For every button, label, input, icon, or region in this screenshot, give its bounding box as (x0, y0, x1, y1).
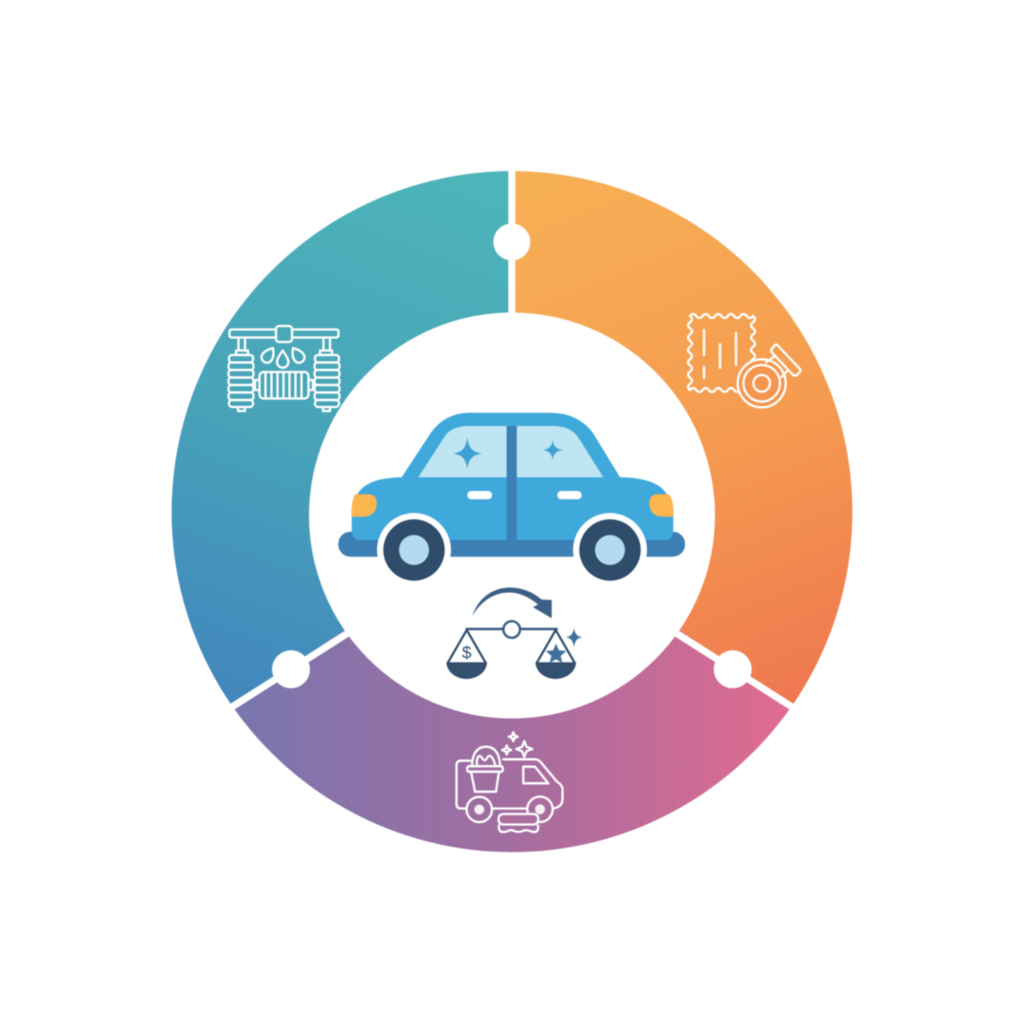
car body (352, 413, 673, 540)
car left window (418, 426, 507, 477)
icon: car wash brushes (228, 326, 340, 411)
left window sparkle (453, 437, 482, 470)
door handle right (557, 491, 582, 499)
right window sparkle (543, 440, 563, 460)
left wheel (377, 513, 451, 587)
right wheel (573, 513, 647, 587)
panel: purple ring segment (232, 516, 792, 852)
quality star (546, 644, 566, 663)
scale pivot (503, 621, 520, 638)
panel: teal ring segment (172, 171, 512, 706)
car right window (517, 426, 603, 477)
sparkle (566, 628, 582, 647)
connector dot: left (272, 650, 310, 688)
panel: orange ring segment (512, 171, 852, 706)
icon: balance scale price versus quality (446, 588, 582, 679)
dollar sign: $ (462, 643, 472, 662)
curved arrow (472, 588, 552, 618)
inner white circle (309, 312, 715, 718)
connector dot: right (714, 650, 752, 688)
icon: mobile detailing van (456, 732, 562, 832)
divider: lower left gap (224, 629, 354, 712)
car sill and bumper (338, 532, 685, 557)
door handle left (467, 491, 492, 499)
scale beam (466, 628, 558, 630)
right pan (536, 630, 576, 679)
right headlight (649, 494, 673, 517)
door pillar (507, 426, 517, 540)
divider: top gap (508, 165, 515, 330)
car illustration (338, 413, 685, 587)
connector dot: top (493, 224, 530, 260)
divider: lower right gap (670, 629, 800, 712)
left headlight (352, 494, 377, 517)
icon: scratched panel and polisher (688, 314, 800, 407)
